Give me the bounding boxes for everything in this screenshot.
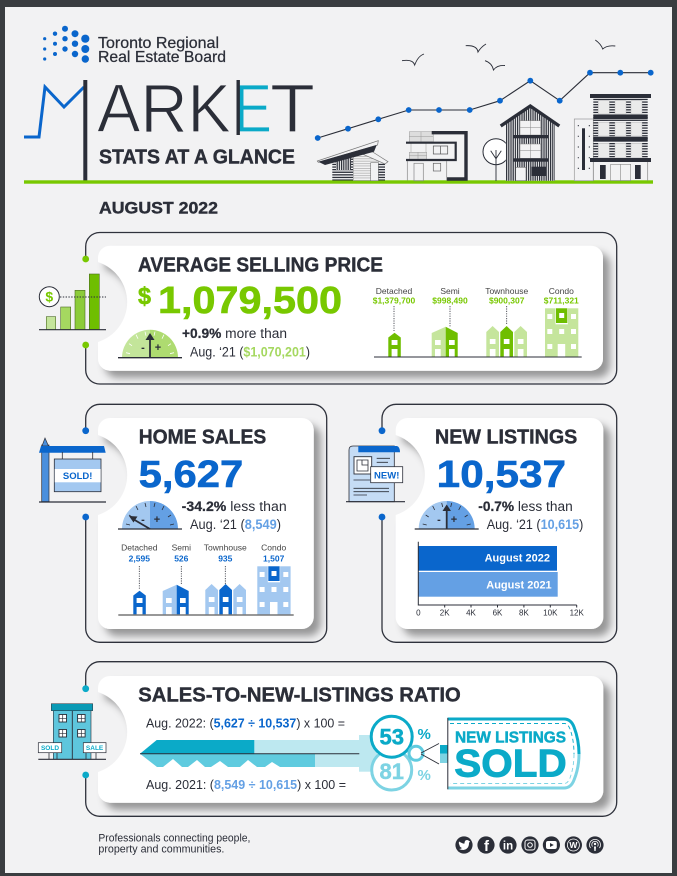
bar chart: new listings comparison: 8K — [519, 609, 529, 618]
result circles: 53% and 81% — [371, 716, 431, 790]
social icons: in — [503, 840, 513, 852]
gauge: - — [141, 342, 145, 354]
bar chart: new listings comparison: 2K — [440, 609, 450, 618]
icon: sold and for sale building: SALE — [86, 745, 104, 752]
chart: sales by property type: Detached — [121, 543, 158, 553]
icon: sold sign: SOLD! — [63, 471, 92, 482]
building: apartment — [574, 94, 651, 181]
title: MARKET — [24, 70, 315, 183]
result circles: 53% and 81%: 53 — [379, 724, 404, 750]
change text: -0.7% less than — [478, 499, 573, 514]
logo: Toronto Regional Real Estate Board: Toronto Regional — [98, 35, 219, 52]
gauge — [415, 501, 479, 529]
gauge: + — [451, 514, 457, 526]
formula 2022: Aug. 2022: (5,627 ÷ 10,537) x 100 = — [146, 716, 345, 731]
gauge: + — [154, 514, 160, 526]
tag: new listings sold — [421, 718, 579, 789]
bar chart: new listings comparison: 12K — [570, 609, 584, 618]
icon: new listing document — [346, 446, 405, 502]
chart: sales by property type: 935 — [218, 554, 233, 564]
social icons: f — [484, 838, 490, 855]
tag: new listings sold: SOLD — [454, 743, 567, 786]
gauge — [118, 330, 182, 358]
title: MARKET: T — [270, 70, 315, 147]
result circles: 53% and 81%: % — [418, 767, 431, 784]
panel: sales-to-new-listings ratio — [38, 662, 617, 816]
panel: average selling price — [39, 232, 617, 384]
birds — [402, 40, 615, 70]
title: MARKET: E — [234, 70, 272, 147]
bar chart: new listings comparison: 6K — [493, 609, 503, 618]
change text — [182, 499, 287, 532]
chart: sales by property type: Semi — [172, 543, 191, 553]
date heading: AUGUST 2022 — [99, 198, 218, 218]
heading: NEW LISTINGS — [435, 426, 577, 448]
chart: price by property type: Townhouse — [485, 286, 528, 296]
change text: +0.9% more than — [182, 326, 287, 341]
chart: sales by property type: 526 — [174, 554, 189, 564]
chart: sales by property type — [118, 543, 294, 615]
footer tagline: property and communities. — [98, 844, 224, 856]
chart: sales by property type: Townhouse — [204, 543, 247, 553]
footer tagline: Professionals connecting people, — [98, 833, 250, 845]
title: MARKET: ARK — [97, 70, 231, 147]
chart: price by property type: Semi — [440, 286, 460, 296]
chart: price by property type: Condo — [549, 286, 574, 296]
big value: 1,079,500 — [158, 280, 342, 322]
heading: AVERAGE SELLING PRICE — [138, 255, 383, 277]
chart: sales by property type: 2,595 — [129, 554, 150, 564]
footer tagline — [98, 833, 250, 856]
big value: 5,627 — [139, 454, 243, 496]
big value: 10,537 — [437, 454, 566, 496]
logo: Toronto Regional Real Estate Board — [43, 26, 226, 66]
icon: sold and for sale building: SOLD — [41, 745, 59, 752]
icon: rising bars with dollar: $ — [45, 289, 53, 305]
chart: price by property type: Detached — [376, 286, 412, 296]
icon: sold sign — [39, 438, 106, 502]
gauge: + — [155, 342, 161, 354]
tree — [483, 139, 509, 181]
tag: new listings sold: NEW LISTINGS — [455, 729, 566, 746]
bar chart: new listings comparison: 0 — [416, 609, 421, 618]
chart: price by property type: $998,490 — [432, 296, 468, 306]
social icons — [455, 836, 604, 855]
formula 2021: Aug. 2021: (8,549 ÷ 10,615) x 100 = — [146, 777, 346, 792]
change text — [182, 326, 310, 360]
result circles: 53% and 81%: % — [418, 726, 431, 743]
skyline ground line — [24, 180, 653, 184]
house: gabled striped — [501, 106, 559, 181]
heading: HOME SALES — [139, 426, 266, 448]
gauge — [118, 501, 182, 529]
chart: price by property type: $1,379,700 — [373, 296, 416, 306]
change text: Aug. ‘21 (8,549) — [190, 517, 281, 532]
bar chart: new listings comparison: August 2021 — [486, 580, 552, 592]
social icons: W — [569, 840, 578, 850]
bar chart: new listings comparison — [416, 542, 584, 618]
gauge: - — [437, 514, 441, 526]
subtitle: STATS AT A GLANCE — [99, 146, 295, 168]
icon: new listing document: NEW! — [374, 471, 399, 482]
bar chart: new listings comparison: 4K — [466, 609, 477, 618]
panel: new listings — [346, 404, 617, 642]
bar chart: new listings comparison: 10K — [543, 609, 558, 618]
line chart over skyline — [315, 70, 654, 141]
chart: price by property type: $711,321 — [544, 296, 579, 306]
icon: sold and for sale building — [38, 704, 106, 759]
icon: rising bars with dollar — [39, 274, 106, 330]
chart: price by property type: $900,307 — [489, 296, 525, 306]
house: modern frame — [406, 132, 466, 181]
chart: price by property type — [373, 286, 582, 357]
change text — [478, 499, 583, 532]
change text: -34.2% less than — [182, 499, 287, 514]
chart: sales by property type: Condo — [261, 543, 286, 553]
house: sloped roof — [317, 141, 388, 181]
change text: Aug. ‘21 ($1,070,201) — [190, 345, 310, 360]
heading: SALES-TO-NEW-LISTINGS RATIO — [138, 685, 461, 707]
gauge: - — [141, 514, 145, 526]
key graphic — [140, 735, 377, 772]
logo: Toronto Regional Real Estate Board: Real Estate Board — [98, 49, 226, 66]
change text: Aug. ‘21 (10,615) — [487, 517, 583, 532]
chart: sales by property type: 1,507 — [263, 554, 285, 564]
big value: $ — [138, 283, 152, 310]
bar chart: new listings comparison: August 2022 — [485, 553, 550, 565]
panel: home sales — [39, 404, 327, 642]
result circles: 53% and 81%: 81 — [379, 759, 404, 784]
